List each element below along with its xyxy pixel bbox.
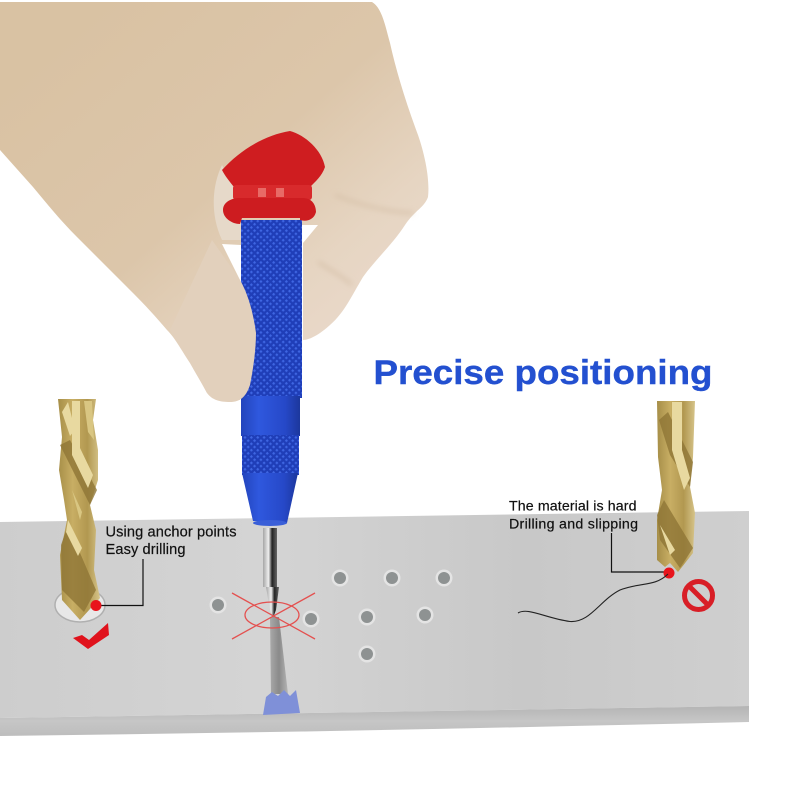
- center punch body: [241, 220, 302, 526]
- left callout text: Using anchor points: [106, 525, 236, 541]
- scratch shadow beneath punch: [263, 617, 300, 715]
- red target crosshair: [232, 593, 315, 639]
- title: Precise positioning: [374, 354, 712, 392]
- right drill bit: [657, 401, 695, 572]
- icon: red check mark: [73, 623, 109, 649]
- text: Easy drilling: [106, 542, 186, 558]
- metal plate: [0, 511, 749, 736]
- punch steel tip: [263, 528, 279, 618]
- icon: prohibition sign: [684, 582, 712, 610]
- right callout leader: [612, 533, 674, 578]
- text: Drilling and slipping: [509, 516, 638, 532]
- left drill bit: [58, 399, 100, 620]
- thumb over punch: [170, 240, 256, 402]
- right callout text: The material is hard: [509, 499, 636, 515]
- red handle cap: [222, 131, 325, 224]
- hand: [0, 2, 428, 400]
- left hole: [55, 588, 105, 622]
- punch marks on the plate: [210, 570, 452, 662]
- left callout leader: [90, 559, 143, 611]
- scratch line: [518, 574, 668, 622]
